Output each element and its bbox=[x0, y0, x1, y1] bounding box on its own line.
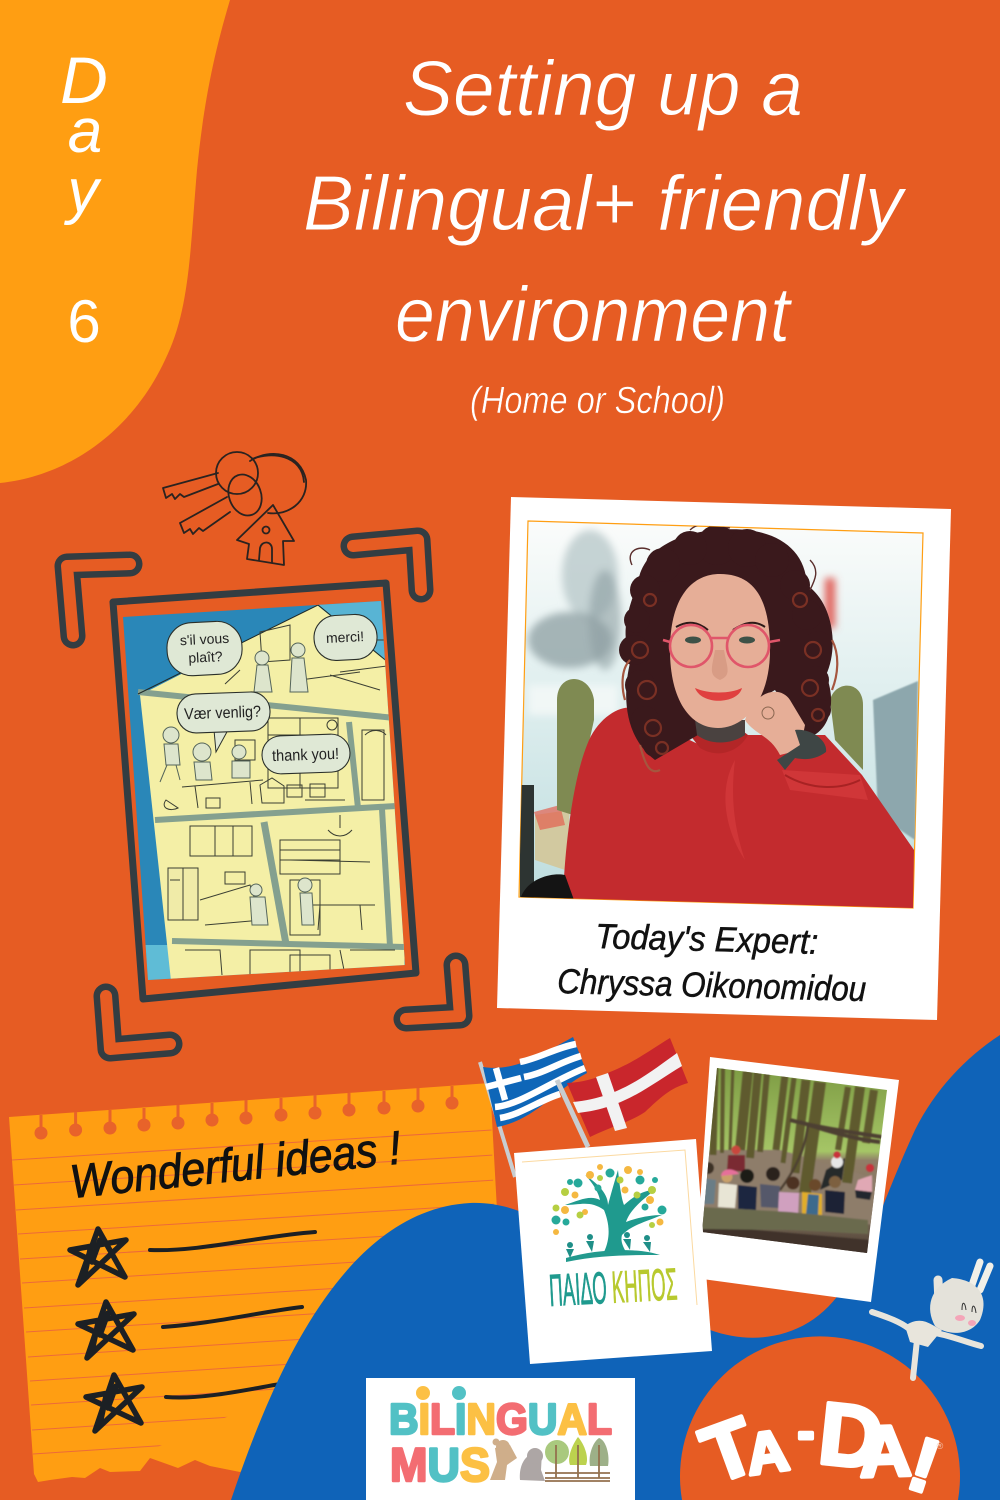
corner bracket top right bbox=[353, 540, 421, 590]
speech bubble: Vær venlig?: Vær venlig? bbox=[184, 704, 261, 723]
icon: star 1 bbox=[70, 1229, 126, 1285]
title: Setting up a bbox=[403, 44, 803, 132]
icon: star 2 bbox=[78, 1302, 134, 1358]
trees and fence bbox=[545, 1437, 610, 1481]
day label: 6 bbox=[67, 288, 101, 355]
mice bbox=[490, 1438, 545, 1481]
day badge bbox=[0, 0, 230, 483]
photo caption: today's expert bbox=[557, 917, 867, 1009]
tree trunks bbox=[713, 1065, 882, 1193]
corner bracket bottom right bbox=[406, 965, 460, 1019]
flags bbox=[480, 1037, 688, 1177]
speech bubble: thank you! bbox=[261, 733, 351, 775]
speech bubble: merci! bbox=[313, 613, 378, 662]
Bilingual Mus logo bbox=[366, 1378, 635, 1500]
speech bubble: Vær venlig? bbox=[176, 691, 271, 752]
teachers bbox=[727, 1155, 745, 1172]
speech bubble: s'il vous plaît? bbox=[166, 620, 243, 677]
speech bubble: merci!: merci! bbox=[326, 628, 364, 646]
day label: D bbox=[60, 43, 108, 117]
title: Bilingual+ friendly bbox=[303, 159, 907, 247]
hand bbox=[745, 692, 805, 755]
frame rectangle bbox=[113, 583, 416, 999]
speech bubble: thank you!: thank you! bbox=[272, 746, 339, 765]
ruled lines bbox=[12, 1130, 500, 1454]
logo wordmark: ΠΑΙΔΟ ΚΗΠΟΣ bbox=[548, 1258, 678, 1316]
day label: a bbox=[68, 97, 102, 166]
floor bands bbox=[138, 605, 404, 947]
sweater bbox=[563, 708, 914, 912]
expert photo bbox=[519, 521, 923, 912]
binding holes bbox=[35, 1086, 458, 1139]
TA-DA logo: A bbox=[742, 1418, 793, 1488]
day label bbox=[60, 43, 108, 355]
TA-DA logo: A bbox=[858, 1411, 913, 1493]
Greek flag bbox=[480, 1037, 587, 1177]
furniture and characters bbox=[164, 625, 395, 977]
i dots bbox=[416, 1386, 466, 1400]
armchair bbox=[557, 679, 594, 815]
face bbox=[670, 574, 770, 728]
blue background shape bbox=[231, 1035, 1000, 1500]
day label: y bbox=[64, 157, 102, 226]
TA-DA logo: T bbox=[690, 1400, 767, 1500]
photo caption: today's expert: Today's Expert: bbox=[595, 917, 819, 962]
icon: keys with house keyring bbox=[163, 452, 306, 565]
hair curls bbox=[623, 524, 837, 771]
subtitle: (Home or School) bbox=[470, 380, 725, 422]
notepad heading: Wonderful ideas ! bbox=[68, 1121, 403, 1208]
Danish flag bbox=[557, 1038, 688, 1147]
registered mark: ® bbox=[937, 1441, 944, 1451]
line 3 bbox=[166, 1384, 280, 1398]
log bbox=[702, 1207, 868, 1234]
photo caption: today's expert: Chryssa Oikonomidou bbox=[557, 962, 867, 1009]
children on log bbox=[702, 1162, 845, 1216]
icon: star 3 bbox=[86, 1375, 142, 1431]
speech bubble: s'il vous plaît?: plaît? bbox=[188, 648, 223, 666]
forest polaroid bbox=[695, 1057, 899, 1302]
wordmark: BILINGUAL bbox=[389, 1395, 612, 1444]
corner bracket top left bbox=[67, 564, 130, 636]
expert polaroid bbox=[497, 497, 951, 1020]
ground bbox=[702, 1228, 869, 1253]
comic: house cross-section bbox=[123, 601, 405, 980]
forest photo bbox=[700, 1065, 887, 1260]
title bbox=[303, 44, 907, 358]
corner bracket bottom left bbox=[106, 996, 170, 1049]
wordmark: MUS bbox=[390, 1438, 490, 1491]
comic photo frame bbox=[67, 540, 460, 1049]
bunny mascot bbox=[872, 1262, 990, 1378]
orange circle bbox=[680, 1336, 960, 1500]
speech bubble: s'il vous plaît?: s'il vous bbox=[179, 630, 230, 648]
TA-DA logo bbox=[690, 1383, 949, 1500]
watch bbox=[777, 730, 826, 770]
TA-DA logo: - bbox=[798, 1406, 814, 1459]
line 1 bbox=[150, 1232, 315, 1250]
wordmark bbox=[389, 1395, 612, 1491]
title: environment bbox=[395, 270, 793, 358]
glasses bbox=[663, 625, 780, 667]
TA-DA logo: D bbox=[814, 1383, 888, 1488]
neck bbox=[695, 720, 745, 742]
kindergarten logo polaroid bbox=[514, 1139, 712, 1364]
notepad panel bbox=[9, 1083, 500, 1482]
line 2 bbox=[163, 1307, 302, 1327]
tree logo bbox=[552, 1164, 666, 1262]
hair bbox=[619, 525, 833, 760]
